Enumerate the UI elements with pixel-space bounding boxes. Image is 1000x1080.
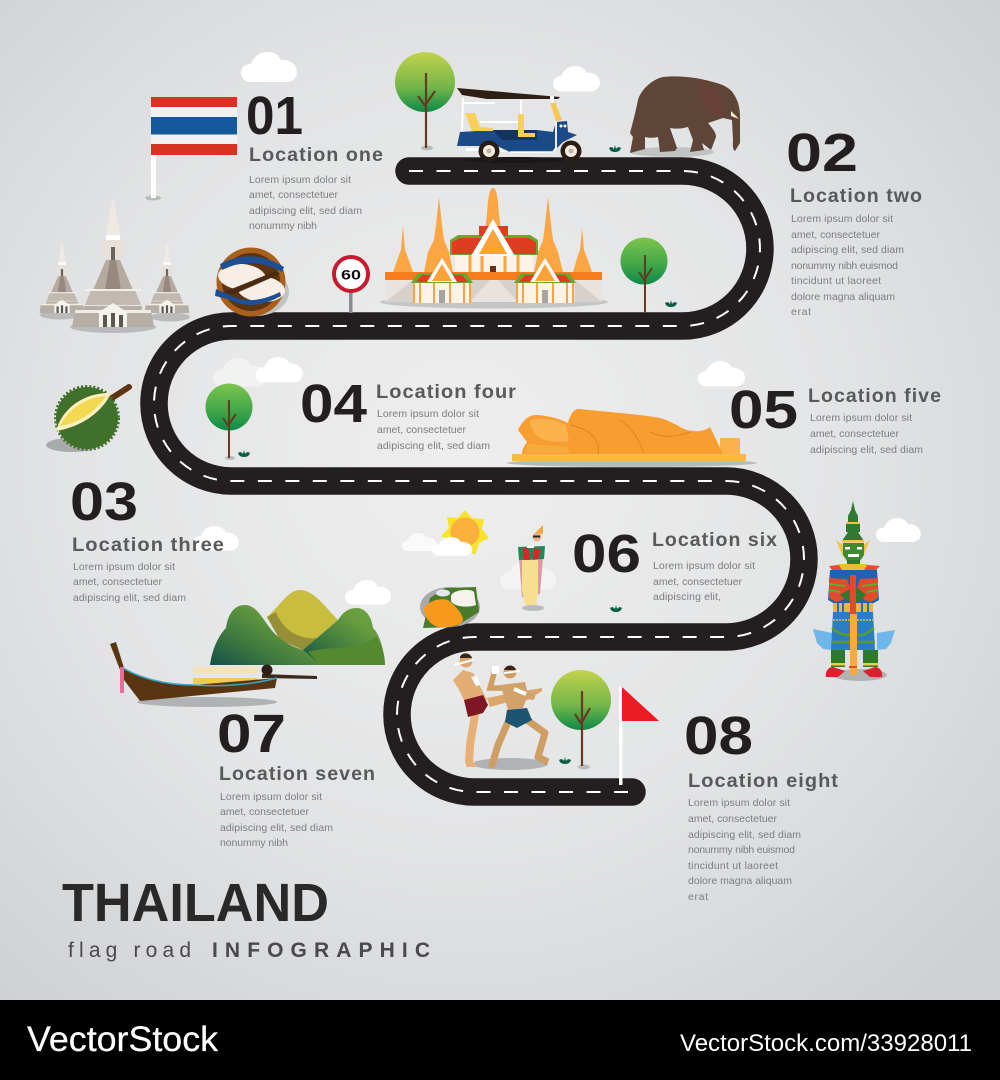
text: location two: Lorem ipsum dolor sit [791,213,893,225]
text: location two: tincidunt ut laoreet [791,275,881,287]
number 06: 06 [572,524,641,584]
text: location two [791,213,904,318]
text: location four: adipiscing elit, sed diam [377,440,490,452]
text: location seven: adipiscing elit, sed diam [220,822,333,834]
footer band [0,1000,1000,1080]
subtitle: flag road [68,939,191,962]
tree: location eight [551,670,611,770]
icon: temple giant guardian [813,501,895,681]
cloud: right of buddha [698,361,745,386]
text: location five [810,412,923,456]
text: location three: adipiscing elit, sed diam [73,592,186,604]
text: location five: Lorem ipsum dolor sit [810,412,912,424]
text: location eight [688,797,801,903]
text: location one: nonummy nibh [249,220,317,232]
icon: mango sticky rice [420,587,480,628]
icon: mountains [210,590,385,665]
icon: grand palace temple [380,188,608,308]
text: location seven [220,791,333,849]
flag: Thailand [145,97,237,200]
heading: location four: Location four [376,382,517,403]
cloud: below sun [432,537,472,556]
icon: elephant [630,76,740,157]
icon: grass [610,605,622,612]
cloud: pale near location four [213,358,266,386]
icon: wat arun right prang [144,243,190,322]
text: location eight: dolore magna aliquam [688,875,792,887]
icon: grass [559,757,571,764]
text: location six: amet, consectetuer [653,576,742,588]
heading: location three: Location three [72,535,225,556]
heading: location one: Location one [249,145,384,166]
text: location eight: erat [688,891,708,903]
text: location seven: amet, consectetuer [220,806,310,818]
heading: location two: Location two [790,186,923,207]
heading: location eight: Location eight [688,771,839,792]
icon: speed sign 60: 60 [341,266,361,282]
icon: speed sign 60 [334,257,368,313]
text: location two: erat [791,306,811,318]
icon: fish basket [215,248,289,316]
text: location four: Lorem ipsum dolor sit [377,408,479,420]
icon: reclining buddha [507,409,757,467]
text: location three: Lorem ipsum dolor sit [73,561,175,573]
text: location four [377,408,490,452]
cloud: top left [241,52,297,82]
icon: wat arun left prang [39,243,85,320]
tree: location four [206,384,252,460]
cloud: pale behind dancer [500,561,556,590]
text: location five: adipiscing elit, sed diam [810,444,923,456]
text: location six: Lorem ipsum dolor sit [653,560,755,572]
number 02: 02 [786,123,858,183]
road [154,171,804,792]
number 04: 04 [300,374,367,434]
cloud: right of giant [876,518,921,542]
icon: grass [238,450,250,457]
tree: temple [620,238,668,313]
heading: location five: Location five [808,386,942,407]
footer url: VectorStock.com/33928011 [680,1030,972,1057]
icon: thai dancer [518,525,545,611]
text: location two: amet, consectetuer [791,229,880,241]
text: location eight: adipiscing elit, sed diam [688,829,801,841]
text: location one: amet, consectetuer [249,189,338,201]
number 05: 05 [729,380,798,440]
text: location eight: tincidunt ut laoreet [688,860,778,872]
icon: muay thai fighters [453,653,548,770]
cloud: location three [193,526,239,551]
tree: top [395,52,455,150]
icon: finish flag [619,687,659,785]
text: location eight: amet, consectetuer [688,813,778,825]
text: location one: Lorem ipsum dolor sit [249,174,351,186]
heading: location six: Location six [652,530,778,551]
title: THAILAND [62,873,329,933]
icon: sun [441,510,489,555]
subtitle [68,939,430,962]
text: location two: adipiscing elit, sed diam [791,244,904,256]
icon: grass [609,145,621,152]
number 01: 01 [246,86,303,146]
text: location one: adipiscing elit, sed diam [249,205,362,217]
left fighter [453,653,542,767]
text: location four: amet, consectetuer [377,424,466,436]
text: location eight: nonummy nibh euismod [688,844,795,856]
text: location seven: nonummy nibh [220,837,288,849]
icon: grass [665,300,677,307]
icon: tuk tuk [457,88,582,163]
text: location one [249,174,362,232]
heading: location seven: Location seven [219,764,376,785]
text: location six: adipiscing elit, [653,591,721,603]
cloud: above mountains [345,580,391,605]
icon: long tail boat [110,642,317,707]
text: location six [653,560,755,603]
text: location three: amet, consectetuer [73,576,162,588]
number 08: 08 [684,706,753,766]
cloud: above tuk tuk [553,66,600,91]
number 03: 03 [70,472,138,532]
text: location eight: Lorem ipsum dolor sit [688,797,790,809]
text: location two: nonummy nibh euismod [791,260,898,272]
text: location five: amet, consectetuer [810,428,900,440]
text: location two: dolore magna aliquam [791,291,895,303]
subtitle: INFOGRAPHIC [212,939,430,962]
icon: wat arun main prang [70,200,156,333]
footer brand: VectorStock [27,1020,219,1059]
right fighter [490,666,548,765]
text: location seven: Lorem ipsum dolor sit [220,791,322,803]
cloud: pale left of sun [402,533,437,551]
cloud: near location four [256,357,303,382]
number 07: 07 [217,704,286,764]
icon: durian [46,387,129,452]
text: location three [73,561,186,604]
